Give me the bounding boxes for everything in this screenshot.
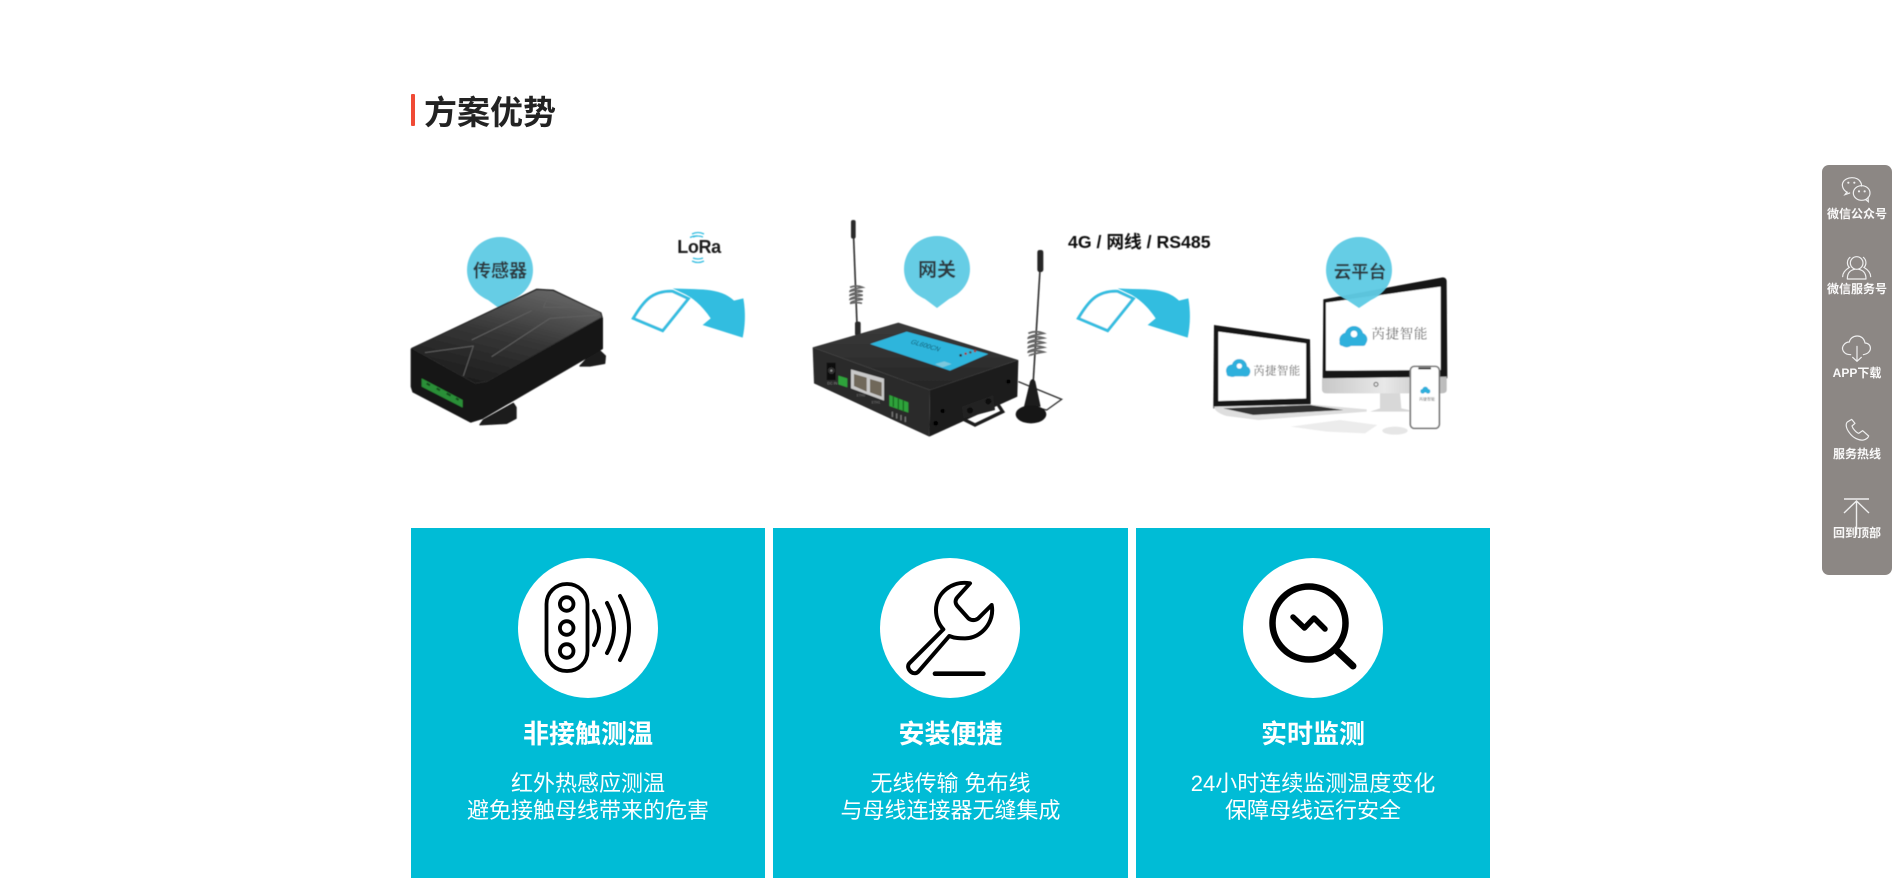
device: gateway: ETH1 xyxy=(872,400,880,404)
description: 无线传输 免布线 xyxy=(870,771,1031,796)
label: 4G / 网线 / RS485: 4G / 网线 / RS485 xyxy=(1068,232,1211,252)
device: computers: 芮捷智能 xyxy=(1419,396,1435,403)
bubble: 网关 xyxy=(904,236,970,308)
title accent bar xyxy=(411,94,415,126)
device: sensor xyxy=(412,290,605,425)
label: 回到顶部: 回到顶部 xyxy=(1833,526,1881,540)
heading: 非接触测温 xyxy=(523,719,653,749)
arrow: 4G link xyxy=(1078,288,1190,338)
icon: wrench xyxy=(880,558,1020,698)
panel: 非接触测温 xyxy=(411,528,765,878)
description: 24小时连续监测温度变化 xyxy=(1191,771,1435,796)
bubble: 云平台 xyxy=(1326,237,1392,308)
description: 红外热感应测温 xyxy=(511,771,665,796)
description: 避免接触母线带来的危害 xyxy=(467,798,709,822)
description xyxy=(1191,771,1435,822)
device: computers xyxy=(1213,277,1447,435)
label: 微信公众号: 微信公众号 xyxy=(1827,207,1887,221)
icon: cloud download xyxy=(1842,335,1871,362)
panel: 实时监测 xyxy=(1136,528,1490,878)
icon: wechat xyxy=(1842,177,1871,203)
description: 保障母线运行安全 xyxy=(1225,798,1401,822)
heading: 实时监测 xyxy=(1261,719,1365,749)
device: gateway: ETH0 xyxy=(857,394,865,398)
LoRa logo xyxy=(677,232,722,262)
label: 微信服务号: 微信服务号 xyxy=(1827,282,1887,296)
sidebar xyxy=(1822,165,1892,575)
device: computers: 芮捷智能 xyxy=(1253,363,1301,379)
icon: infrared sensor xyxy=(518,558,658,698)
LoRa logo: LoRa xyxy=(677,237,722,257)
description xyxy=(467,771,709,822)
description: 与母线连接器无缝集成 xyxy=(840,798,1060,822)
device: gateway xyxy=(813,220,1062,437)
description xyxy=(840,771,1060,822)
icon: back to top xyxy=(1844,498,1870,535)
icon: users xyxy=(1842,256,1872,280)
title xyxy=(411,94,556,131)
heading: 安装便捷 xyxy=(898,719,1002,749)
panel: 安装便捷 xyxy=(773,528,1128,878)
device: gateway: DC IN xyxy=(827,381,838,385)
label: APP下载: APP下载 xyxy=(1833,366,1881,380)
device: computers: 芮捷智能 xyxy=(1371,322,1428,342)
bubble: 云平台: 云平台 xyxy=(1334,262,1386,282)
bubble: 传感器: 传感器 xyxy=(473,261,527,281)
icon: phone xyxy=(1846,418,1870,441)
device: gateway: GL600CN xyxy=(909,339,942,353)
label: 服务热线: 服务热线 xyxy=(1833,447,1881,461)
system diagram xyxy=(410,219,1448,438)
bubble: 网关: 网关 xyxy=(918,259,956,281)
icon: magnifier with wave xyxy=(1243,558,1383,698)
arrow: LoRa link xyxy=(633,288,745,338)
bubble: 传感器 xyxy=(467,237,533,309)
title text: 方案优势 xyxy=(424,94,556,131)
